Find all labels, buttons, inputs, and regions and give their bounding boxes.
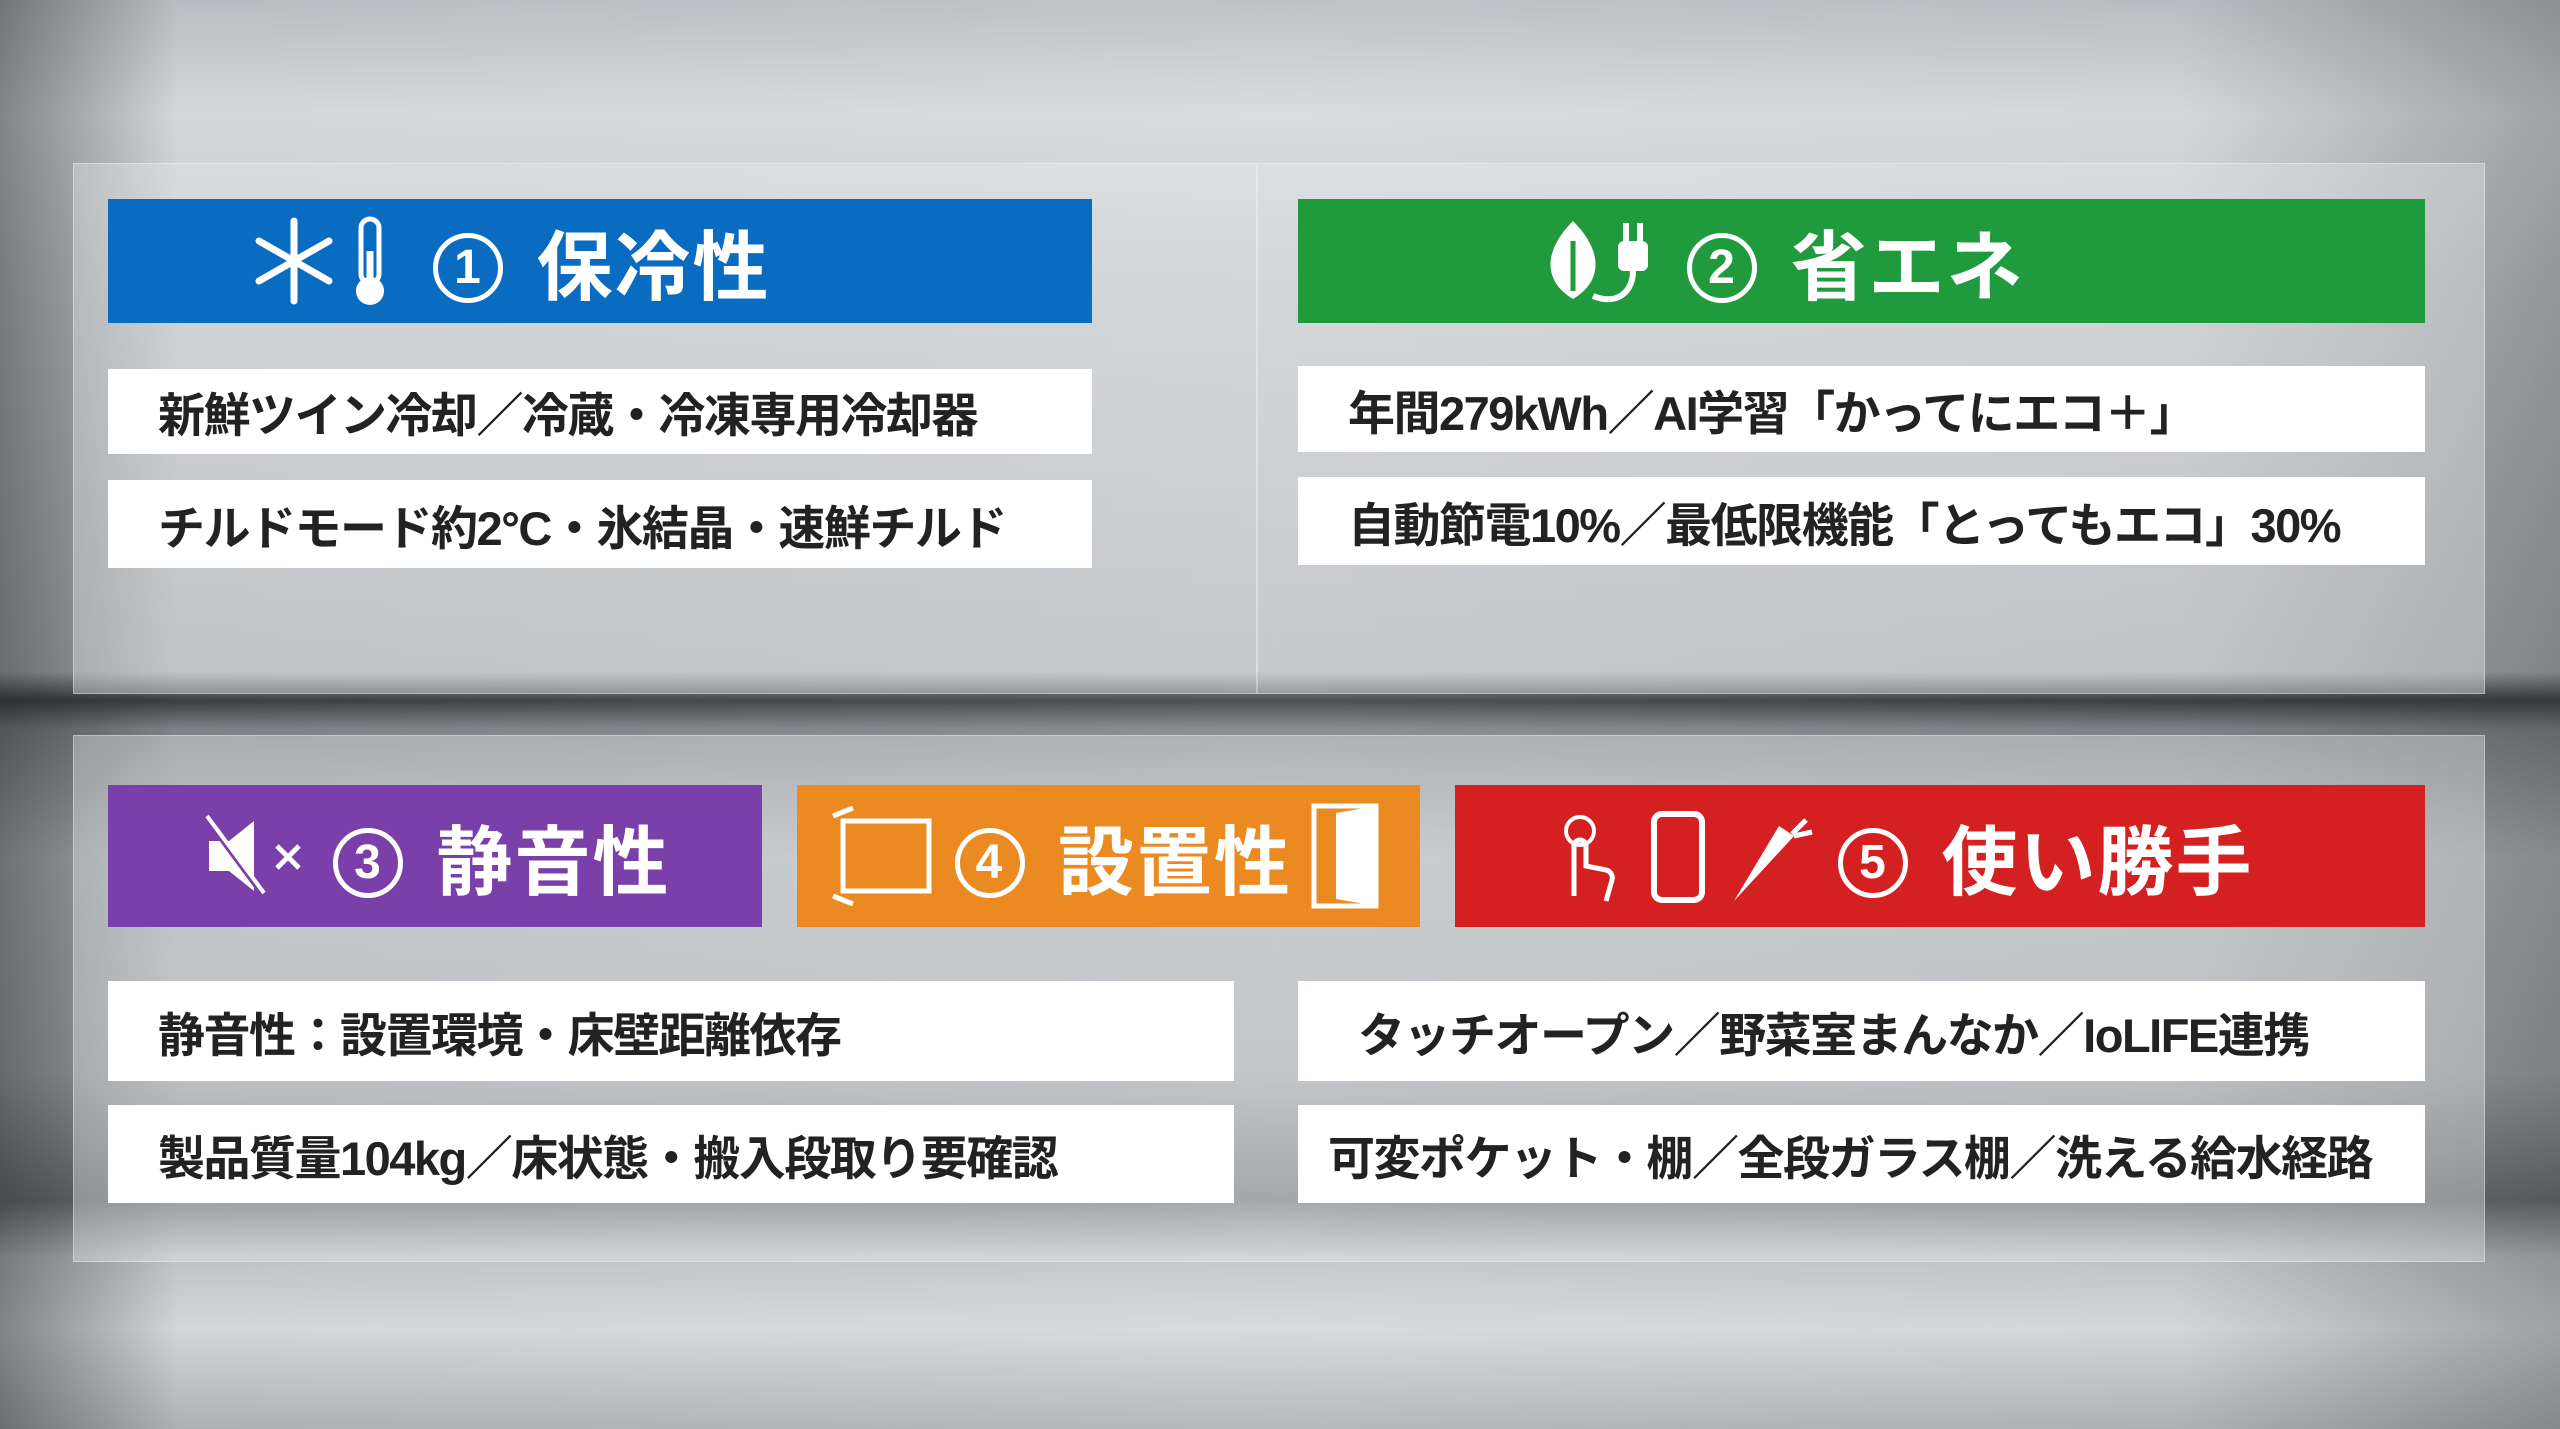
heading: 静音性: 3	[354, 836, 383, 889]
heading: 使い勝手	[1455, 785, 2425, 927]
icon: leaf & plug	[1550, 221, 1648, 302]
heading: 保冷性	[108, 199, 1092, 323]
icon: touch, phone, carrot	[1564, 811, 1812, 903]
text: 保冷性 row2: チルドモード約2°C・氷結晶・速鮮チルド	[158, 502, 1006, 554]
text: 設置性 row: 製品質量104kg／床状態・搬入段取り要確認	[158, 1132, 1057, 1184]
heading: 設置性: 設置性	[1058, 821, 1292, 906]
heading: 使い勝手: 使い勝手	[1942, 821, 2254, 906]
heading: 保冷性: 1	[454, 241, 483, 294]
text: 使い勝手 row2: 可変ポケット・棚／全段ガラス棚／洗える給水経路	[1328, 1132, 2372, 1184]
text: 省エネ row1: 年間279kWh／AI学習「かってにエコ＋」	[1348, 386, 2195, 440]
text: 保冷性 row1: 新鮮ツイン冷却／冷蔵・冷凍専用冷却器	[158, 389, 977, 442]
heading: 保冷性: 保冷性	[537, 226, 771, 311]
heading: 使い勝手: 5	[1859, 836, 1888, 889]
heading: 省エネ	[1298, 199, 2425, 323]
heading: 静音性: 静音性	[437, 821, 671, 906]
icon: snowflake & thermometer	[256, 216, 384, 305]
text: 保冷性 row2	[108, 480, 1092, 568]
text: 省エネ row2: 自動節電10%／最低限機能「とってもエコ」30%	[1348, 498, 2340, 552]
text: 静音性 row: 静音性：設置環境・床壁距離依存	[158, 1008, 840, 1062]
panel: top right	[1257, 163, 2485, 694]
icon: door	[1312, 804, 1378, 908]
heading: 設置性	[797, 785, 1420, 927]
panel: bottom	[73, 735, 2485, 1262]
text: 使い勝手 row2	[1298, 1105, 2425, 1203]
heading: 省エネ: 2	[1708, 241, 1737, 294]
text: 設置性 row	[108, 1105, 1234, 1203]
icon: resize arrows	[832, 806, 932, 906]
heading: 省エネ: 省エネ	[1791, 226, 2025, 311]
text: 保冷性 row1	[108, 369, 1092, 454]
text: 省エネ row1	[1298, 366, 2425, 452]
heading: 設置性: 4	[976, 836, 1004, 889]
text: 省エネ row2	[1298, 477, 2425, 565]
heading: 静音性	[108, 785, 762, 927]
panel: top left	[73, 163, 1257, 694]
text: 静音性 row	[108, 981, 1234, 1081]
text: 使い勝手 row1: タッチオープン／野菜室まんなか／IoLIFE連携	[1358, 1008, 2309, 1062]
text: 使い勝手 row1	[1298, 981, 2425, 1081]
icon: mute speaker	[205, 814, 301, 894]
